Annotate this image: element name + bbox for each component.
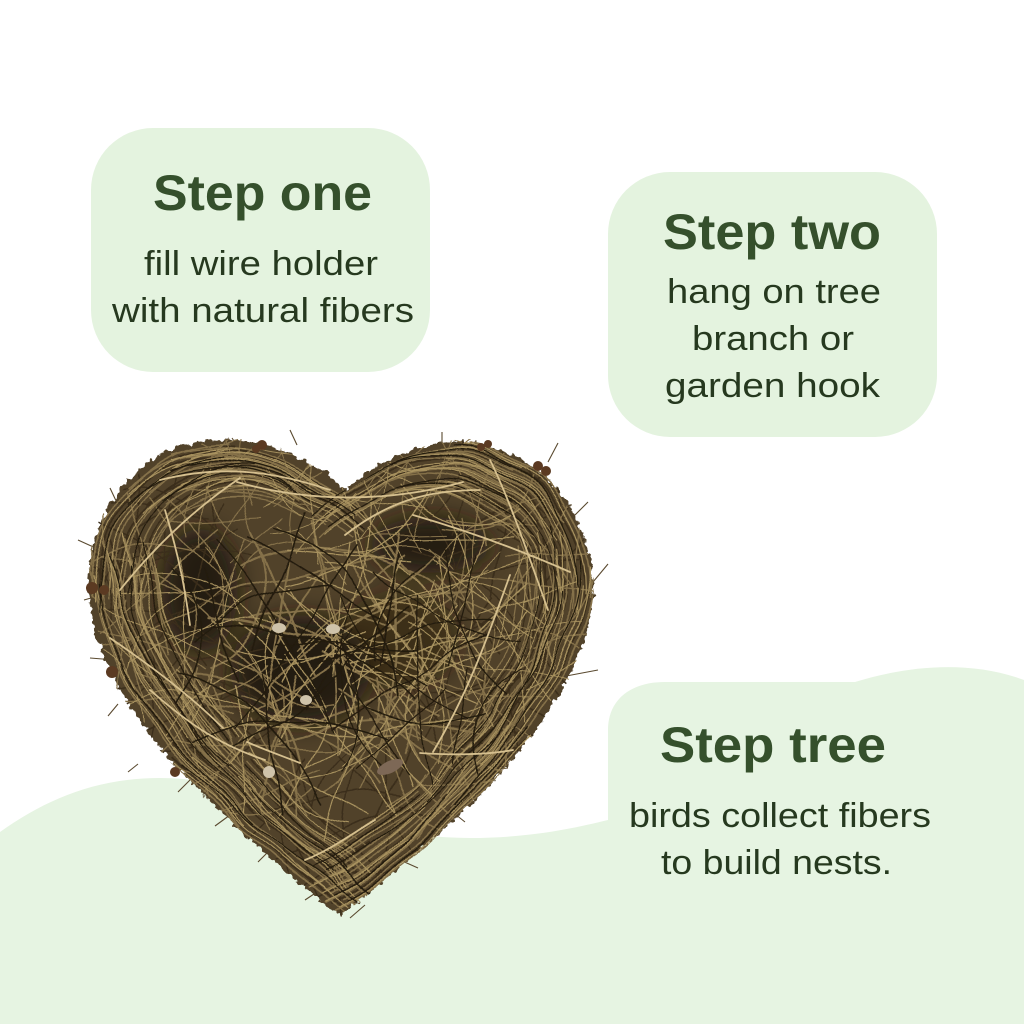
text: step three description	[629, 797, 931, 882]
bright straw strands	[110, 460, 570, 860]
heading: step one: Step one	[153, 165, 372, 221]
dried bud clusters	[86, 440, 551, 777]
dark hollow of the nest	[162, 517, 490, 725]
text: step one description: fill wire holder	[144, 245, 378, 283]
panel: step one	[91, 128, 430, 372]
text: step two description	[665, 273, 881, 405]
nest body	[88, 440, 593, 915]
panel: step three text	[629, 717, 931, 882]
heading: step two: Step two	[663, 204, 881, 260]
text: step three description: to build nests.	[661, 844, 892, 882]
woven fibers	[88, 438, 594, 916]
background green hill with step three panel	[0, 667, 1024, 1024]
text: step one description	[111, 245, 414, 330]
text: step three description: birds collect fibers	[629, 797, 931, 835]
text: step one description: with natural fibers	[111, 292, 414, 330]
stray fibers around nest edge	[78, 430, 608, 918]
panel: step two	[608, 172, 937, 437]
text: step two description: garden hook	[665, 367, 881, 405]
heart-shaped nest	[78, 430, 608, 918]
pale fiber tufts	[263, 623, 405, 778]
text: step two description: hang on tree	[667, 273, 881, 311]
text: step two description: branch or	[692, 320, 854, 358]
heading: step tree: Step tree	[660, 717, 886, 773]
